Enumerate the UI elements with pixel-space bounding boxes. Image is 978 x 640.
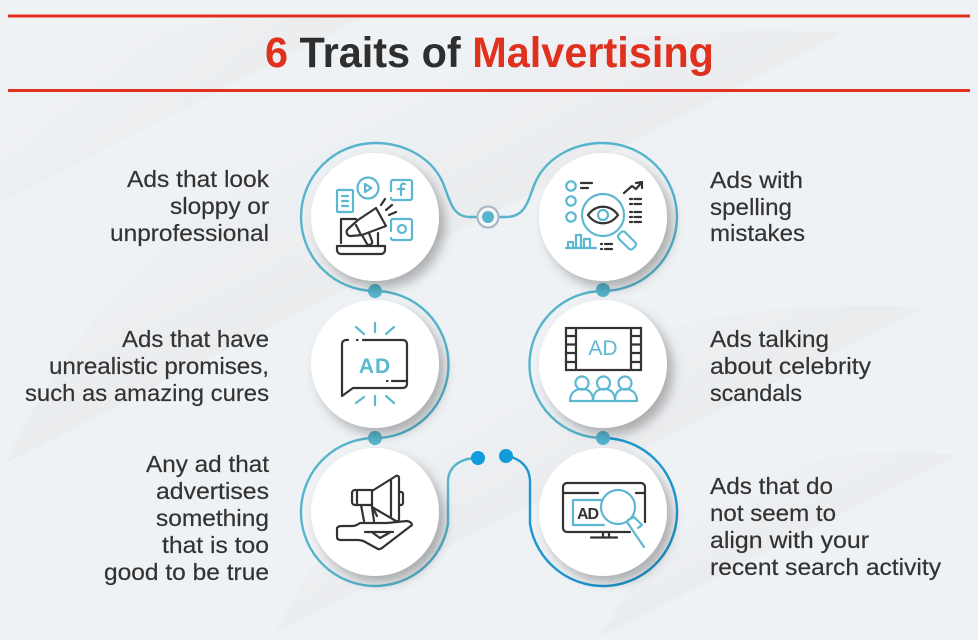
text: spelling mistakes: mistakes (710, 220, 805, 246)
text: too good to be true: Any ad that (146, 451, 269, 477)
text: ads that look sloppy: sloppy or (170, 193, 269, 219)
text: search activity: not seem to (710, 500, 836, 526)
text: too good to be true: advertises (156, 478, 269, 504)
text: ads that look sloppy (110, 166, 269, 246)
icon: eye with magnifier and data (566, 181, 642, 251)
text: unrealistic promises: unrealistic promises, (49, 353, 269, 379)
text: ads that look sloppy: unprofessional (110, 220, 269, 246)
icon: film with ad and audience (566, 328, 641, 401)
text: too good to be true: something (156, 505, 269, 531)
text: search activity (710, 473, 941, 580)
circle 3 (311, 300, 439, 428)
text: celebrity scandals: Ads talking (710, 326, 829, 352)
circle 2 (539, 153, 667, 281)
circle 1 (311, 153, 439, 281)
circle 4 (539, 300, 667, 428)
text: unrealistic promises: Ads that have (122, 326, 269, 352)
connector nodes (368, 206, 610, 465)
text: search activity: align with your (710, 527, 869, 553)
icon: hand holding megaphone (337, 476, 412, 549)
title: 6 Traits of Malvertising (265, 29, 714, 77)
text: celebrity scandals: scandals (710, 380, 802, 406)
text: unrealistic promises (25, 326, 269, 406)
text: unrealistic promises: such as amazing cures (25, 380, 269, 406)
text: celebrity scandals: about celebrity (710, 353, 871, 379)
text: spelling mistakes: spelling (710, 194, 792, 220)
icon: film with ad and audience: AD (588, 337, 618, 360)
text: spelling mistakes: Ads with (710, 167, 803, 193)
text: celebrity scandals (710, 326, 871, 406)
text: ads that look sloppy: Ads that look (127, 166, 269, 192)
circle 6 (539, 448, 667, 576)
text: too good to be true: good to be true (104, 559, 269, 585)
text: search activity: recent search activity (710, 554, 941, 580)
icon: ad speech bubble (342, 323, 407, 405)
text: spelling mistakes (710, 167, 805, 246)
text: too good to be true (104, 451, 269, 585)
connector line (301, 143, 677, 586)
circle 5 (311, 448, 439, 576)
icon: monitor with ad under magnifier (563, 483, 645, 547)
text: too good to be true: that is too (162, 532, 269, 558)
icon: laptop with megaphone and social media (337, 178, 412, 254)
title band (8, 14, 970, 92)
text: search activity: Ads that do (710, 473, 833, 499)
icon: monitor with ad under magnifier: AD (577, 506, 599, 523)
icon: ad speech bubble: AD (359, 355, 391, 378)
